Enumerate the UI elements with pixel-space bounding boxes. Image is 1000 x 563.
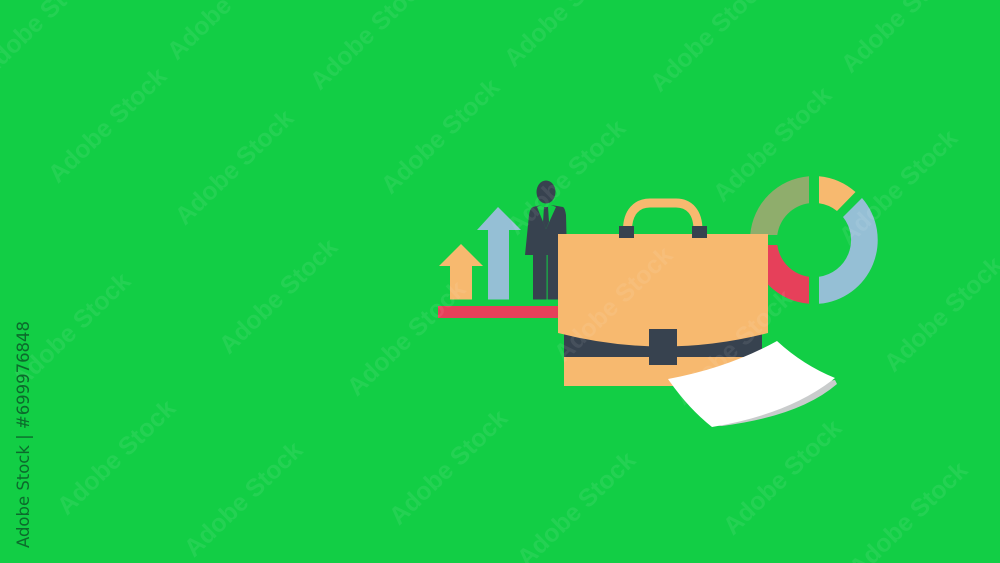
watermark pattern: Adobe Stock bbox=[549, 241, 678, 367]
head bbox=[536, 180, 556, 204]
left latch bbox=[619, 226, 634, 238]
icon: tall blue arrow bbox=[477, 207, 521, 300]
watermark pattern: Adobe Stock bbox=[7, 267, 136, 393]
olive segment bbox=[750, 176, 809, 235]
watermark pattern: Adobe Stock bbox=[342, 275, 471, 401]
icon: businessman bbox=[525, 180, 567, 300]
red base bar bbox=[438, 306, 560, 318]
watermark pattern: Adobe Stock bbox=[214, 233, 343, 359]
right latch bbox=[692, 226, 707, 238]
watermark pattern: Adobe Stock bbox=[43, 62, 172, 188]
icon: briefcase bbox=[558, 203, 768, 386]
tie bbox=[543, 207, 549, 229]
shirt collar bbox=[537, 205, 556, 229]
watermark pattern: Adobe Stock bbox=[502, 114, 631, 240]
watermark pattern: Adobe Stock bbox=[384, 404, 513, 530]
watermark pattern: Adobe Stock bbox=[708, 81, 837, 207]
clasp bbox=[649, 329, 677, 365]
orange segment bbox=[819, 176, 856, 211]
watermark pattern: Adobe Stock bbox=[52, 394, 181, 520]
watermark pattern: Adobe Stock bbox=[179, 436, 308, 562]
watermark pattern: Adobe Stock bbox=[669, 284, 798, 410]
icon: growth arrows on base bbox=[438, 207, 560, 318]
lower body bbox=[564, 330, 762, 386]
chart: donut bbox=[750, 176, 878, 304]
suit bbox=[525, 205, 567, 300]
icon: small orange arrow bbox=[439, 244, 483, 300]
back sheet bbox=[700, 380, 837, 426]
handle bbox=[628, 203, 698, 230]
watermark pattern: Adobe Stock bbox=[170, 104, 299, 230]
stock ID caption: Adobe Stock | #699976848 bbox=[14, 321, 34, 548]
front sheet bbox=[668, 341, 835, 427]
blue segment bbox=[819, 198, 878, 304]
watermark pattern: Adobe Stock bbox=[376, 73, 505, 199]
dark strap bbox=[564, 334, 762, 357]
icon: paper sheets bbox=[668, 341, 837, 427]
red segment bbox=[750, 245, 809, 304]
watermark pattern: Adobe Stock bbox=[718, 414, 847, 540]
watermark pattern: Adobe Stock bbox=[834, 124, 963, 250]
upper flap bbox=[558, 234, 768, 346]
